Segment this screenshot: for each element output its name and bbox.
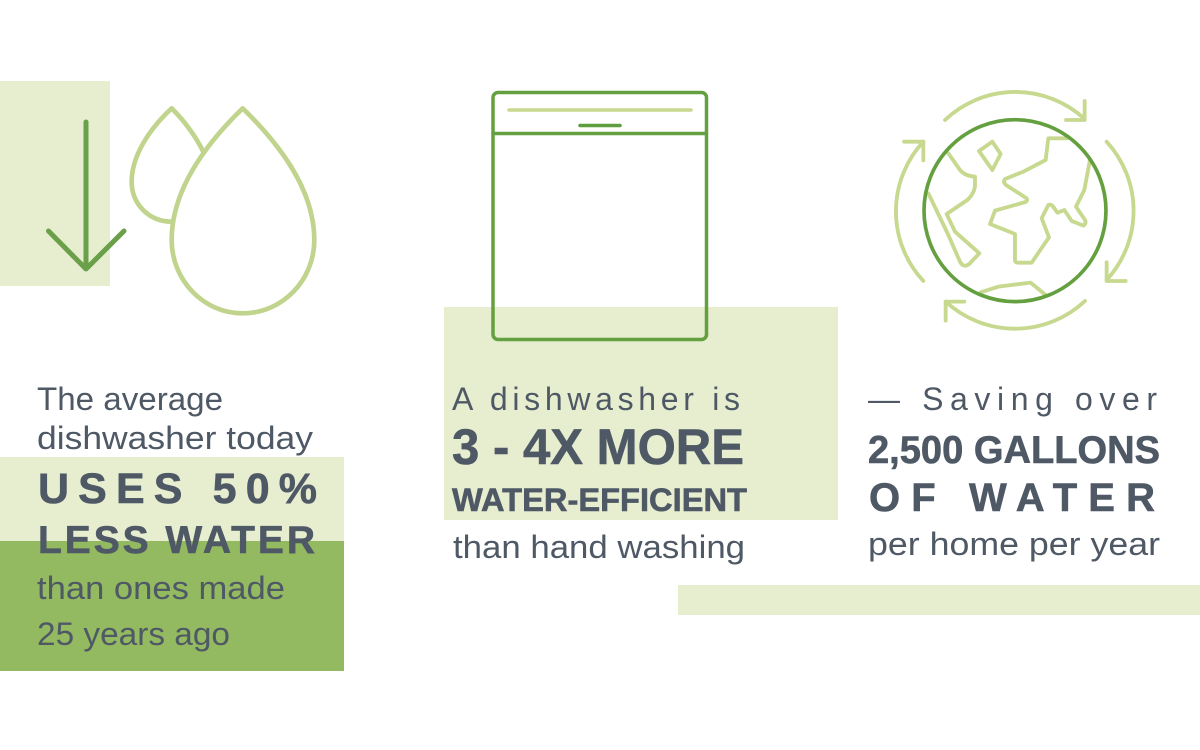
text block: left statistic: than ones made: [37, 570, 285, 606]
text block: centre statistic: 3 - 4X MORE: [452, 419, 744, 475]
text block: centre statistic: than hand washing: [453, 529, 745, 565]
icon: dishwasher: [493, 92, 706, 340]
panel: left text light band: [0, 457, 344, 541]
text block: centre statistic: A dishwasher is: [452, 381, 740, 417]
icon: water drops: [132, 108, 314, 313]
icon: globe with cycle arrows: [896, 92, 1134, 329]
text block: left statistic: 25 years ago: [37, 616, 230, 652]
text block: left statistic: dishwasher today: [37, 420, 313, 456]
panel: centre text backdrop: [444, 307, 838, 520]
text block: right statistic: per home per year: [868, 526, 1160, 562]
panel: left text green band: [0, 541, 344, 671]
text block: left statistic: LESS WATER: [38, 519, 315, 562]
icon: down arrow: [48, 122, 124, 269]
text block: left statistic: [37, 381, 317, 652]
text block: right statistic: 2,500 GALLONS: [868, 429, 1160, 472]
panel: arrow backdrop: [0, 81, 110, 286]
text block: right statistic: [868, 381, 1160, 562]
text block: left statistic: The average: [37, 381, 223, 417]
text block: right statistic: OF WATER: [869, 476, 1155, 520]
text block: left statistic: USES 50%: [38, 465, 317, 513]
text block: centre statistic: WATER-EFFICIENT: [452, 482, 747, 518]
text block: right statistic: — Saving over: [868, 381, 1157, 417]
panel: bottom right strip: [678, 585, 1200, 615]
text block: centre statistic: [452, 381, 747, 565]
